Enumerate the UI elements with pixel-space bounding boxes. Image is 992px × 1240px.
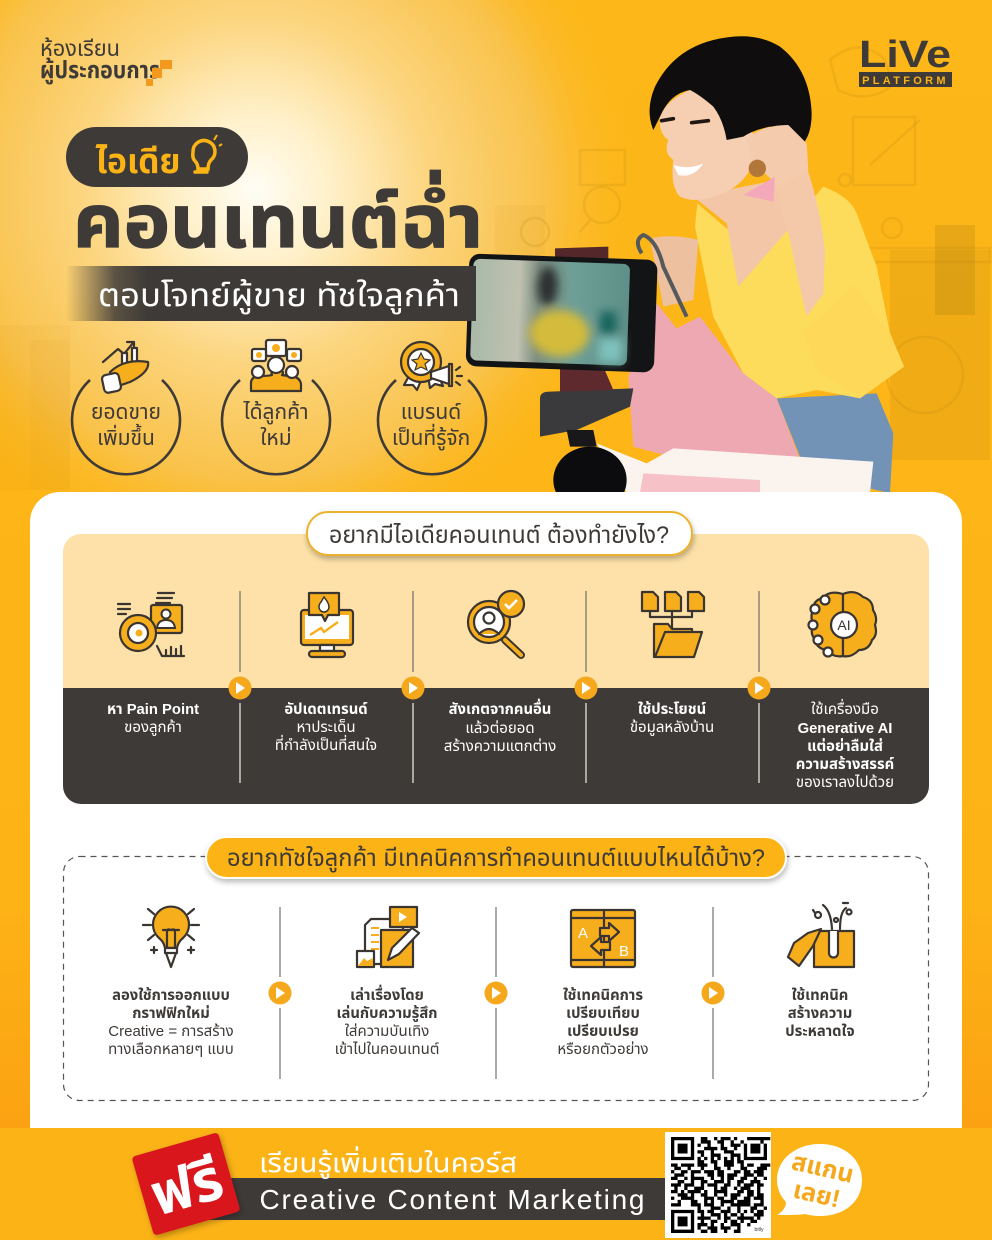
- text: Generative AI: Generative AI: [798, 721, 892, 737]
- icon: hand with growth chart: [101, 342, 148, 393]
- icon: trending monitor: [301, 593, 353, 657]
- text: เล่าเรื่องโดย: ใส่ความบันเทิง: [345, 1022, 429, 1040]
- title: คอนเทนต์ฉ่ำ: [73, 170, 483, 263]
- benefit: แบรนด์เป็นที่รู้จัก: [378, 342, 486, 474]
- text: Generative AI: [796, 698, 894, 791]
- pink shirt: [628, 304, 799, 457]
- icon: surprise gift box: [788, 903, 854, 967]
- text: ใช้เทคนิคการเปรียบเทียบ: [557, 988, 649, 1058]
- text: ใช้ประโยชน์: [630, 702, 714, 736]
- text: อัปเดตเทรนด์: อัปเดตเทรนด์: [284, 702, 368, 718]
- text: หา Pain Point: หา Pain Point: [107, 702, 199, 718]
- course title band: เรียนรู้เพิ่มเติมในคอร์ส: [259, 1146, 517, 1179]
- faint background doodles and city: [0, 48, 990, 490]
- icon: target customer profile: [118, 593, 184, 656]
- badge: ฟรี: [131, 1132, 241, 1236]
- text: สังเกตจากคนอื่น: สร้างความแตกต่าง: [444, 737, 556, 755]
- benefit: ได้ลูกค้าใหม่: ใหม่: [260, 426, 292, 450]
- hair: [650, 36, 812, 143]
- subtitle band: ตอบโจทย์ผู้ขาย ทัชใจลูกค้า: [98, 277, 460, 315]
- text: ใช้เทคนิคสร้างความประหลาดใจ: สร้างความ: [788, 1006, 852, 1022]
- phone: [466, 253, 658, 373]
- benefit: ยอดขายเพิ่มขึ้น: ยอดขาย: [91, 401, 161, 424]
- text: Generative AI: ของเราลงไปด้วย: [796, 774, 894, 791]
- QR code: [665, 1132, 771, 1238]
- rolled sleeve: [860, 334, 904, 398]
- dividers and arrows: [228, 591, 770, 783]
- icon: award and megaphone: [401, 342, 462, 390]
- heading pill: อยากทัชใจลูกค้า มีเทคนิคการทำคอนเทนต์แบบไหนได้บ้าง?: [227, 845, 765, 873]
- text: ลองใช้การออกแบบ: Creative = การสร้าง: [108, 1023, 234, 1040]
- text: ใช้เทคนิคการเปรียบเทียบ: ใช้เทคนิคการ: [563, 988, 643, 1004]
- text: ใช้เทคนิคสร้างความประหลาดใจ: [785, 988, 855, 1040]
- text: ลองใช้การออกแบบ: กราฟฟิกใหม่: [132, 1005, 210, 1022]
- tripod: [540, 388, 633, 437]
- text: เล่าเรื่องโดย: เล่นกับความรู้สึก: [336, 1005, 438, 1023]
- eyes and smile: [662, 119, 708, 123]
- icon: AI brain: [808, 592, 876, 656]
- icon: AI brain: AI: [837, 617, 851, 633]
- text: อัปเดตเทรนด์: หาประเด็น: [296, 718, 356, 736]
- hand: [753, 125, 808, 179]
- white content panel: [30, 492, 962, 1128]
- text: ใช้ประโยชน์: ใช้ประโยชน์: [638, 702, 706, 718]
- footer band: [0, 1128, 992, 1240]
- logo: Live Platform: [859, 34, 952, 87]
- text: ลองใช้การออกแบบ: ทางเลือกหลายๆ แบบ: [108, 1041, 234, 1058]
- icon: customers with hearts: [251, 340, 301, 391]
- text: ลองใช้การออกแบบ: [108, 988, 234, 1058]
- logo: Live Platform: PLATFORM: [862, 75, 949, 87]
- text: ใช้เทคนิคการเปรียบเทียบ: เปรียบเทียบ: [566, 1006, 640, 1022]
- panel: content techniques: [64, 837, 928, 1100]
- hanger: [638, 235, 687, 317]
- speech bubble: สแกนเลย: [777, 1144, 862, 1216]
- text: Generative AI: แต่อย่าลืมใส่: [807, 738, 883, 755]
- heading pill: [206, 837, 786, 878]
- benefit: แบรนด์เป็นที่รู้จัก: แบรนด์: [401, 401, 461, 424]
- speech bubble: สแกนเลย: สแกน: [789, 1148, 856, 1189]
- icon: story script and pencil: [357, 907, 419, 967]
- text: Generative AI: ความสร้างสรรค์: [796, 757, 894, 773]
- yellow shirt: [695, 187, 904, 398]
- logo: ห้องเรียนผู้ประกอบการ: ห้องเรียน: [40, 36, 120, 61]
- text: ใช้เทคนิคสร้างความประหลาดใจ: ใช้เทคนิค: [792, 988, 848, 1004]
- folded clothes: [597, 443, 873, 493]
- benefit: แบรนด์เป็นที่รู้จัก: เป็นที่รู้จัก: [392, 423, 470, 451]
- text: หา Pain Point: ของลูกค้า: [124, 719, 182, 736]
- QR code: bitly: [755, 1227, 764, 1233]
- jeans: [777, 393, 893, 493]
- text: เล่าเรื่องโดย: เข้าไปในคอนเทนต์: [335, 1041, 439, 1058]
- icon: magnifier observing person: [468, 591, 524, 655]
- text: สังเกตจากคนอื่น: [444, 698, 556, 755]
- benefit: ได้ลูกค้าใหม่: ได้ลูกค้า: [242, 400, 309, 425]
- benefit: ยอดขายเพิ่มขึ้น: เพิ่มขึ้น: [97, 423, 155, 450]
- badge: ฟรี: ฟรี: [144, 1146, 230, 1228]
- speech bubble: สแกนเลย: เลย!: [790, 1176, 843, 1214]
- text: Generative AI: ใช้เครื่องมือ: [811, 698, 879, 718]
- text: ลองใช้การออกแบบ: ลองใช้การออกแบบ: [112, 988, 230, 1004]
- text: ใช้เทคนิคสร้างความประหลาดใจ: ประหลาดใจ: [785, 1024, 855, 1040]
- heading pill: [307, 512, 692, 555]
- heading pill: อยากมีไอเดียคอนเทนต์ ต้องทำยังไง?: [329, 522, 669, 549]
- course title band: [205, 1146, 670, 1220]
- photo: presenter with phone on tripod: [466, 36, 904, 513]
- badge: ไอเดีย: ไอเดีย: [96, 142, 180, 181]
- benefit: ยอดขายเพิ่มขึ้น: [72, 342, 180, 474]
- icon: A/B comparison: A: [578, 925, 588, 942]
- text: เล่าเรื่องโดย: เล่าเรื่องโดย: [350, 984, 424, 1004]
- neck and chest: [697, 182, 788, 286]
- text: เล่าเรื่องโดย: [335, 984, 439, 1058]
- icon: A/B comparison: [571, 910, 635, 967]
- badge: ไอเดีย: [66, 127, 248, 187]
- text: สังเกตจากคนอื่น: สังเกตจากคนอื่น: [449, 698, 551, 718]
- text: ใช้เทคนิคการเปรียบเทียบ: หรือยกตัวอย่าง: [557, 1040, 649, 1058]
- logo: Live Platform: LiVe: [859, 34, 951, 76]
- icon: documents into folder: [642, 592, 704, 657]
- course title band: Creative Content Marketing: [260, 1184, 644, 1215]
- earring tassel: [743, 177, 775, 202]
- benefit: ได้ลูกค้าใหม่: [222, 340, 330, 474]
- left arm holding hanger: [650, 236, 698, 307]
- text: อัปเดตเทรนด์: ที่กำลังเป็นที่สนใจ: [275, 734, 377, 754]
- logo: ห้องเรียนผู้ประกอบการ: [40, 36, 172, 86]
- icon: A/B comparison: B: [619, 943, 629, 960]
- text: ใช้ประโยชน์: ข้อมูลหลังบ้าน: [630, 719, 714, 736]
- text: ใช้เทคนิคการเปรียบเทียบ: เปรียบเปรย: [567, 1024, 639, 1040]
- panel: how to get content ideas: [63, 512, 929, 804]
- text: สังเกตจากคนอื่น: แล้วต่อยอด: [465, 719, 535, 737]
- dividers and arrows: [268, 907, 724, 1079]
- raised arm: [779, 170, 825, 316]
- text: อัปเดตเทรนด์: [275, 702, 377, 754]
- logo: ห้องเรียนผู้ประกอบการ: ผู้ประกอบการ: [40, 56, 160, 85]
- icon: light bulb: [143, 907, 199, 967]
- subtitle band: [66, 266, 476, 321]
- text: หา Pain Point: [107, 702, 199, 736]
- face: [660, 90, 753, 200]
